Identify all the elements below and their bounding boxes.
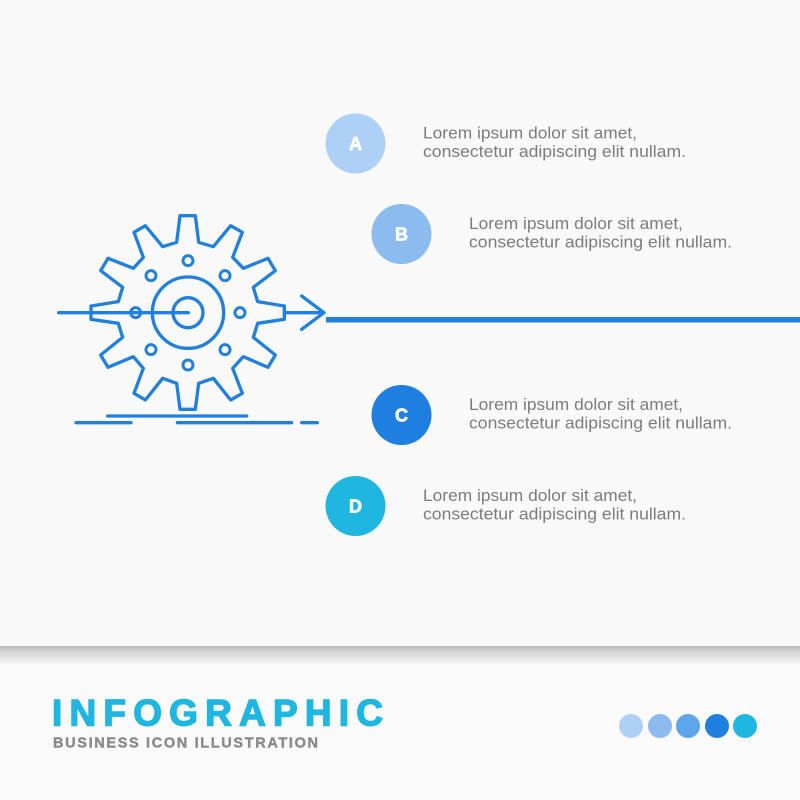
badge B (372, 204, 432, 264)
footer shadow (0, 646, 800, 666)
subtitle: BUSINESS ICON ILLUSTRATION (53, 736, 318, 752)
item B (372, 204, 732, 264)
item D (326, 476, 686, 536)
gear pin holes (131, 256, 245, 370)
badge B: B (395, 224, 408, 244)
item A (326, 114, 686, 174)
footer panel (0, 646, 800, 800)
badge D: D (349, 496, 362, 516)
gear outline (91, 216, 284, 409)
badge C: C (395, 406, 408, 426)
connector line (326, 317, 800, 322)
text A: consectetur adipiscing elit nullam. (423, 142, 686, 161)
badge A (326, 114, 386, 174)
palette dots (619, 714, 757, 738)
badge A: A (349, 134, 362, 154)
badge C (372, 385, 432, 445)
arrow tail (59, 308, 188, 318)
arrow head (284, 296, 324, 329)
text D: consectetur adipiscing elit nullam. (423, 504, 686, 524)
text C: Lorem ipsum dolor sit amet, (469, 395, 683, 414)
text C: consectetur adipiscing elit nullam. (469, 414, 732, 432)
text B: consectetur adipiscing elit nullam. (469, 232, 732, 252)
title: INFOGRAPHIC (52, 692, 383, 734)
badge D (326, 476, 386, 536)
item C (372, 385, 732, 445)
gear rings (152, 277, 224, 348)
text A: Lorem ipsum dolor sit amet, (423, 124, 637, 142)
ground lines (76, 416, 317, 423)
text B: Lorem ipsum dolor sit amet, (469, 214, 683, 233)
icon: gear with arrow (59, 216, 324, 423)
text D: Lorem ipsum dolor sit amet, (423, 486, 637, 505)
